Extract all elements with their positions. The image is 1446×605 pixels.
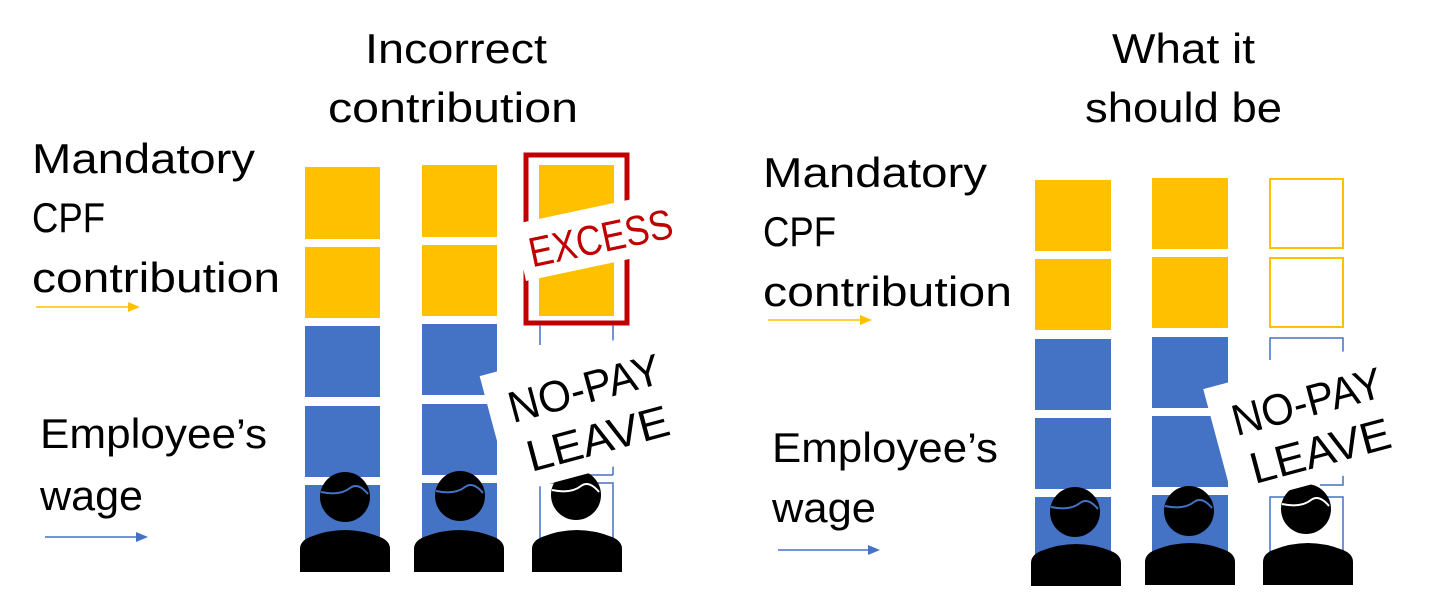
label: employee's wage (left): wage: [39, 472, 143, 519]
icon: person 3: [532, 470, 622, 572]
label: mandatory CPF contribution (left): CPF: [32, 194, 105, 241]
title: what it should be: [1085, 25, 1282, 131]
label: employee's wage (right): [771, 424, 998, 531]
column 3 right (empty outlines): [1263, 179, 1353, 585]
label: mandatory CPF contribution (right): CPF: [763, 208, 836, 255]
icon: person 1: [300, 472, 390, 572]
label: employee's wage (left): Employee’s: [40, 410, 267, 457]
title: what it should be: What it: [1112, 25, 1255, 72]
title: what it should be: should be: [1085, 84, 1282, 131]
label: mandatory CPF contribution (right): [763, 149, 1012, 315]
column 1 right: [1031, 180, 1121, 586]
label: mandatory CPF contribution (left): contribution: [32, 254, 280, 301]
label: mandatory CPF contribution (right): Mandatory: [763, 149, 987, 196]
column 3 left with excess: [514, 155, 687, 572]
icon: person 4: [1031, 487, 1121, 586]
label: employee's wage (left): [39, 410, 267, 519]
label: EXCESS stamp: EXCESS: [524, 200, 677, 276]
sign: NO-PAY LEAVE right: NO-PAY: [1226, 359, 1388, 446]
column 2 right: [1145, 178, 1235, 585]
label: mandatory CPF contribution (left): [32, 135, 280, 301]
label: employee's wage (right): wage: [771, 484, 876, 531]
sign: NO-PAY LEAVE left: NO-PAY: [503, 345, 666, 433]
icon: person 2: [414, 471, 504, 572]
sign: NO-PAY LEAVE left: LEAVE: [521, 397, 675, 482]
arrow: blue left: [45, 532, 148, 542]
column 2 left: [414, 165, 504, 572]
sign: NO-PAY LEAVE right: LEAVE: [1244, 409, 1396, 494]
arrow: yellow right: [768, 315, 872, 325]
title: incorrect contribution: contribution: [328, 84, 578, 131]
arrow: blue right: [778, 545, 880, 555]
label: mandatory CPF contribution (right): contribution: [763, 268, 1012, 315]
icon: person 6: [1263, 484, 1353, 585]
arrow: yellow left: [36, 302, 140, 312]
sign: NO-PAY LEAVE right: [1203, 341, 1412, 505]
label: employee's wage (right): Employee’s: [772, 424, 998, 471]
title: incorrect contribution: Incorrect: [365, 25, 547, 72]
title: incorrect contribution: [328, 25, 578, 131]
sign: NO-PAY LEAVE left: [480, 327, 693, 494]
column 1 left: [300, 167, 390, 572]
label: mandatory CPF contribution (left): Mandatory: [32, 135, 255, 182]
icon: person 5: [1145, 486, 1235, 585]
